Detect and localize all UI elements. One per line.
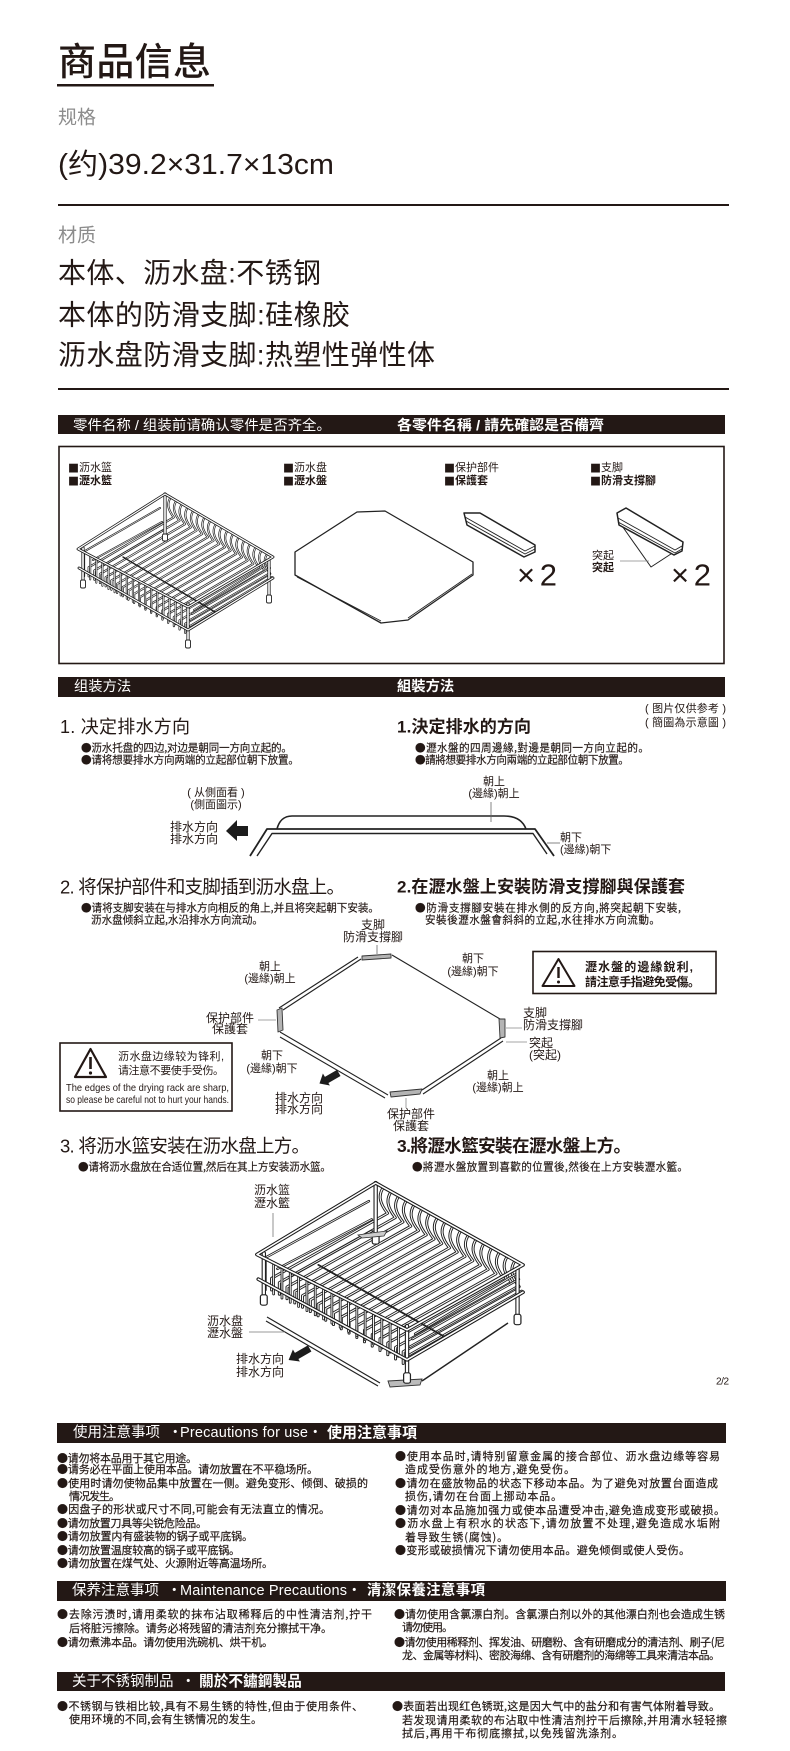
labels: 沥水盘 bbox=[207, 1313, 243, 1328]
guards and feet bbox=[277, 954, 505, 1097]
part label: tray: ■瀝水盤 bbox=[283, 473, 327, 489]
material block: 本体的防滑支脚:硅橡胶 bbox=[58, 300, 350, 330]
list: precautions left bbox=[57, 1450, 368, 1571]
list: precautions right: ●请勿在盛放物品的状态下移动本品。为了避免对放置台面造成 bbox=[395, 1475, 718, 1491]
step 2 traditional: 安裝後瀝水盤會斜斜的立起,水往排水方向流動。 bbox=[425, 912, 660, 928]
part label: basket bbox=[68, 460, 112, 489]
note: image for reference: ( 簡圖為示意圖 ) bbox=[645, 715, 726, 729]
heading bar: precautions for use bbox=[57, 1423, 726, 1443]
labels: 朝下 bbox=[261, 1049, 283, 1062]
labels: (邊緣)朝上 bbox=[472, 1080, 524, 1094]
list: stainless right: 若发现请用柔软的布沾取中性清洁剂拧干后擦除,并用清水轻轻擦 bbox=[402, 1712, 727, 1728]
callout: sharp edge warning traditional: 瀝水盤的邊緣銳利, bbox=[585, 959, 693, 974]
heading bar: stainless steel: ・ bbox=[181, 1674, 196, 1690]
step 3 simplified: ●请将沥水盘放在合适位置,然后在其上方安装沥水篮。 bbox=[78, 1160, 331, 1174]
list: maintenance left: ●请勿煮沸本品。请勿使用洗碗机、烘干机。 bbox=[57, 1634, 273, 1650]
part label: guard: ■保护部件 bbox=[444, 460, 499, 476]
heading bar: stainless steel: 关于不锈钢制品 bbox=[72, 1673, 174, 1690]
illustration: foot bbox=[617, 508, 683, 567]
step 1 traditional: 1.決定排水的方向 bbox=[397, 716, 531, 736]
step 2 simplified: 沥水盘倾斜立起,水沿排水方向流动。 bbox=[91, 912, 263, 928]
list: maintenance right: 龙、金属等材料)、密胶海绵、含有研磨剂的海绵等工具来清洁本品。 bbox=[402, 1647, 720, 1663]
step 3 simplified bbox=[60, 1136, 331, 1174]
heading bar: parts list: 零件名称 / 组装前请确认零件是否齐全。 bbox=[73, 417, 331, 433]
guard on tray bbox=[388, 1379, 422, 1387]
label: edge up: (邊緣)朝上 bbox=[468, 786, 520, 800]
part label: guard bbox=[444, 460, 499, 489]
part label: foot: ■防滑支撐腳 bbox=[590, 473, 656, 489]
list: maintenance right: ●请勿使用含氯漂白剂。含氯漂白剂以外的其他漂白剂也会造成生锈 bbox=[394, 1606, 725, 1622]
labels bbox=[206, 917, 583, 1133]
step 2 traditional: 2.在瀝水盤上安裝防滑支撐腳與保護套 bbox=[397, 876, 685, 896]
list: stainless right bbox=[392, 1698, 727, 1741]
heading bar: maintenance precautions: ・ bbox=[347, 1583, 362, 1599]
quantity: foot: × 2 bbox=[671, 558, 711, 592]
heading bar: parts list bbox=[58, 415, 725, 434]
step 1 traditional: ●瀝水盤的四周邊緣,對邊是朝同一方向立起的。 bbox=[415, 740, 649, 756]
label: protrusion: 突起 bbox=[592, 548, 614, 562]
heading bar: maintenance precautions: 清潔保養注意事項 bbox=[367, 1581, 486, 1599]
callout: sharp edge warning traditional: 請注意手指避免受傷。 bbox=[585, 974, 700, 989]
heading bar: assembly bbox=[58, 677, 725, 697]
note: image for reference bbox=[645, 701, 726, 729]
heading bar: assembly: 組裝方法 bbox=[397, 677, 454, 695]
list: precautions right bbox=[395, 1448, 725, 1558]
material block: 材质 bbox=[58, 224, 96, 246]
back corner bracket bbox=[358, 1231, 387, 1238]
label: edge up: 朝上 bbox=[483, 775, 505, 788]
material block bbox=[58, 224, 435, 370]
part label: guard: ■保護套 bbox=[444, 473, 488, 489]
list: stainless right: ●表面若出现红色锈斑,这是因大气中的盐分和有害气体附着导致。 bbox=[392, 1698, 720, 1714]
illustration: guard bbox=[464, 513, 535, 557]
list: precautions left: ●因盘子的形状或尺寸不同,可能会有无法直立的情况。 bbox=[57, 1501, 330, 1517]
label: edge down: 朝下 bbox=[560, 831, 582, 844]
labels: 突起 bbox=[529, 1035, 553, 1050]
labels: (邊緣)朝下 bbox=[447, 964, 499, 978]
arrow: drain direction bbox=[316, 1066, 342, 1090]
heading bar: stainless steel: 關於不鏽鋼製品 bbox=[199, 1672, 302, 1690]
labels bbox=[207, 1182, 290, 1379]
tray outline bbox=[279, 955, 503, 1098]
arrow: drain direction bbox=[285, 1342, 313, 1366]
arrow: drain direction bbox=[226, 820, 248, 841]
note: image for reference: ( 图片仅供参考 ) bbox=[645, 701, 726, 715]
heading bar: precautions for use: Precautions for use bbox=[180, 1425, 308, 1441]
step 3 traditional bbox=[397, 1136, 688, 1174]
label: drain direction bbox=[170, 819, 218, 846]
part label: tray: ■沥水盘 bbox=[283, 460, 327, 476]
heading bar: assembly: 组装方法 bbox=[74, 678, 131, 695]
list: precautions left: ●使用时请勿使物品集中放置在一侧。避免变形、倾倒、破损的 bbox=[57, 1475, 368, 1491]
basket bbox=[257, 1183, 523, 1383]
part label: foot bbox=[590, 460, 656, 489]
list: maintenance left bbox=[57, 1606, 372, 1650]
heading bar: precautions for use: ・ bbox=[308, 1425, 322, 1441]
step 1 traditional: ●請將想要排水方向兩端的立起部位朝下放置。 bbox=[415, 752, 629, 768]
specification block bbox=[58, 106, 334, 181]
list: precautions right: ●请勿对本品施加强力或使本品遭受冲击,避免造成变形或破损。 bbox=[395, 1502, 725, 1518]
list: precautions left: 情况发生。 bbox=[69, 1488, 120, 1504]
list: precautions right: 损伤,请勿在台面上挪动本品。 bbox=[405, 1488, 562, 1504]
labels: 防滑支撐腳 bbox=[343, 929, 403, 944]
material block: 本体、沥水盘:不锈钢 bbox=[58, 258, 321, 288]
callout: sharp edge warning: The edges of the drying rack are sharp, bbox=[66, 1082, 229, 1094]
heading bar: maintenance precautions: ・ bbox=[167, 1583, 182, 1599]
part label: tray bbox=[283, 460, 327, 489]
label: side view: ( 从側面看 ) bbox=[187, 785, 245, 799]
labels: 排水方向 bbox=[236, 1351, 284, 1366]
labels: (邊緣)朝下 bbox=[246, 1061, 298, 1075]
step 2 simplified: ●请将支脚安装在与排水方向相反的角上,并且将突起朝下安装。 bbox=[81, 900, 379, 916]
labels: 排水方向 bbox=[236, 1364, 284, 1379]
labels: 支脚 bbox=[361, 917, 385, 932]
list: maintenance right bbox=[394, 1606, 725, 1663]
label: side view bbox=[187, 785, 245, 811]
diagram: side view bbox=[170, 775, 611, 856]
label: drain direction: 排水方向 bbox=[170, 831, 218, 846]
list: precautions left: ●请勿放置刀具等尖锐危险品。 bbox=[57, 1515, 207, 1531]
step 1 simplified: ●沥水托盘的四边,对边是朝同一方向立起的。 bbox=[81, 740, 292, 756]
heading bar: stainless steel bbox=[57, 1672, 725, 1691]
callout: sharp edge warning: so please be careful not to hurt your hands. bbox=[66, 1094, 229, 1106]
labels: 防滑支撐腳 bbox=[523, 1017, 583, 1032]
illustration: tray bbox=[295, 511, 473, 623]
label: protrusion bbox=[592, 548, 649, 574]
heading bar: maintenance precautions: Maintenance Precautions bbox=[180, 1583, 347, 1599]
heading bar: precautions for use: 使用注意事项 bbox=[73, 1423, 160, 1441]
list: stainless left bbox=[57, 1698, 363, 1727]
heading bar: parts list: 各零件名稱 / 請先確認是否備齊 bbox=[397, 417, 604, 433]
panel: parts bbox=[59, 446, 724, 664]
list: maintenance left: ●去除污渍时,请用柔软的抹布沾取稀释后的中性清洁剂,拧干 bbox=[57, 1606, 372, 1622]
labels: 朝上 bbox=[487, 1069, 509, 1082]
step 2 traditional bbox=[397, 876, 685, 928]
label: edge up bbox=[468, 775, 520, 822]
tray under basket bbox=[266, 1317, 508, 1386]
list: maintenance left: 后将脏污擦除。请务必将残留的清洁剂充分擦拭干净。 bbox=[69, 1620, 332, 1636]
step 1 simplified: ●请将想要排水方向两端的立起部位朝下放置。 bbox=[81, 752, 299, 768]
step 1 simplified bbox=[60, 717, 299, 768]
labels: 沥水篮 bbox=[254, 1182, 290, 1197]
heading bar: maintenance precautions: 保养注意事项 bbox=[72, 1581, 159, 1599]
list: precautions left: ●请勿将本品用于其它用途。 bbox=[57, 1450, 197, 1466]
step 3 simplified: 3. 将沥水篮安装在沥水盘上方。 bbox=[60, 1136, 310, 1156]
icon: warning triangle bbox=[542, 959, 574, 986]
label: drain direction: 排水方向 bbox=[170, 819, 218, 834]
step 1 traditional bbox=[397, 716, 649, 768]
labels: 保护部件 bbox=[387, 1106, 435, 1121]
diagram: tray with guards and feet bbox=[206, 917, 583, 1133]
list: stainless left: 使用环境的不同,会有生锈情况的发生。 bbox=[69, 1711, 262, 1727]
diagram: basket on tray bbox=[207, 1182, 523, 1387]
list: precautions right: ●沥水盘上有积水的状态下,请勿放置不处理,避免造成水垢附 bbox=[395, 1515, 720, 1531]
step 3 traditional: 3.將瀝水籃安裝在瀝水盤上方。 bbox=[397, 1136, 631, 1156]
labels: 保護套 bbox=[212, 1021, 248, 1036]
list: precautions left: ●请勿放置在煤气处、火源附近等高温场所。 bbox=[57, 1555, 273, 1571]
specification block: (约)39.2×31.7×13cm bbox=[58, 148, 334, 181]
list: maintenance right: ●请勿使用稀释剂、挥发油、研磨粉、含有研磨成分的清洁剂、刷子(尼 bbox=[394, 1634, 725, 1650]
labels: 排水方向 bbox=[275, 1101, 323, 1116]
specification block: 规格 bbox=[58, 106, 96, 128]
labels: 瀝水籃 bbox=[254, 1195, 290, 1210]
labels: 朝下 bbox=[462, 952, 484, 965]
list: maintenance right: 请勿使用。 bbox=[402, 1619, 453, 1635]
list: precautions right: ●变形或破损情况下请勿使用本品。避免倾倒或使人受伤。 bbox=[395, 1542, 690, 1558]
labels: 排水方向 bbox=[275, 1090, 323, 1105]
heading bar: precautions for use: ・ bbox=[168, 1425, 182, 1441]
labels: 支脚 bbox=[523, 1005, 547, 1020]
heading bar: precautions for use: 使用注意事項 bbox=[327, 1424, 417, 1442]
callout: sharp edge warning: 沥水盘边缘较为锋利, bbox=[118, 1049, 224, 1063]
part label: basket: ■沥水篮 bbox=[68, 460, 112, 476]
step 2 traditional: ●防滑支撐腳安裝在排水側的反方向,將突起朝下安裝, bbox=[415, 900, 681, 916]
list: stainless left: ●不锈钢与铁相比较,具有不易生锈的特性,但由于使用条件、 bbox=[57, 1698, 363, 1714]
illustration: basket bbox=[78, 494, 273, 648]
label: side view: (側面圖示) bbox=[190, 798, 242, 811]
list: precautions right: ●使用本品时,请特别留意金属的接合部位、沥水盘边缘等容易 bbox=[395, 1448, 720, 1464]
material block: 沥水盘防滑支脚:热塑性弹性体 bbox=[58, 340, 435, 370]
label: edge down: (邊緣)朝下 bbox=[560, 842, 611, 856]
callout: sharp edge warning: 请注意不要使手受伤。 bbox=[118, 1063, 224, 1077]
labels: 保護套 bbox=[393, 1118, 429, 1133]
list: precautions right: 着导致生锈(腐蚀)。 bbox=[405, 1529, 508, 1545]
step 1 simplified: 1. 决定排水方向 bbox=[60, 717, 190, 737]
page number: 2/2 bbox=[716, 1376, 729, 1388]
step 3 traditional: ●將瀝水盤放置到喜歡的位置後,然後在上方安裝瀝水籃。 bbox=[412, 1160, 688, 1174]
quantity: guard: × 2 bbox=[517, 558, 557, 592]
labels: 保护部件 bbox=[206, 1010, 254, 1025]
labels: (邊緣)朝上 bbox=[244, 971, 296, 985]
title: 商品信息 bbox=[58, 42, 211, 84]
list: precautions left: ●请勿放置内有盛装物的锅子或平底锅。 bbox=[57, 1528, 253, 1544]
step 2 simplified bbox=[60, 876, 379, 928]
list: stainless right: 拭后,再用干布彻底擦拭,以免残留洗涤剂。 bbox=[402, 1725, 623, 1741]
step 2 simplified: 2. 将保护部件和支脚插到沥水盘上。 bbox=[60, 876, 345, 898]
labels: (突起) bbox=[529, 1047, 561, 1062]
heading bar: maintenance precautions bbox=[57, 1581, 726, 1601]
list: precautions left: ●请务必在平面上使用本品。请勿放置在不平稳场所。 bbox=[57, 1461, 318, 1477]
callout: sharp edge warning traditional bbox=[533, 952, 716, 994]
list: precautions right: 造成受伤意外的地方,避免受伤。 bbox=[405, 1461, 575, 1477]
list: precautions left: ●请勿放置温度较高的锅子或平底锅。 bbox=[57, 1542, 240, 1558]
label: protrusion: 突起 bbox=[592, 560, 614, 574]
labels: 瀝水盤 bbox=[207, 1325, 243, 1340]
label: edge down bbox=[547, 831, 611, 856]
labels: 朝上 bbox=[259, 960, 281, 973]
tray profile bbox=[250, 816, 554, 856]
part label: basket: ■瀝水籃 bbox=[68, 473, 112, 489]
icon: warning triangle bbox=[75, 1049, 106, 1077]
callout: sharp edge warning bbox=[60, 1043, 232, 1111]
part label: foot: ■支脚 bbox=[590, 460, 623, 476]
